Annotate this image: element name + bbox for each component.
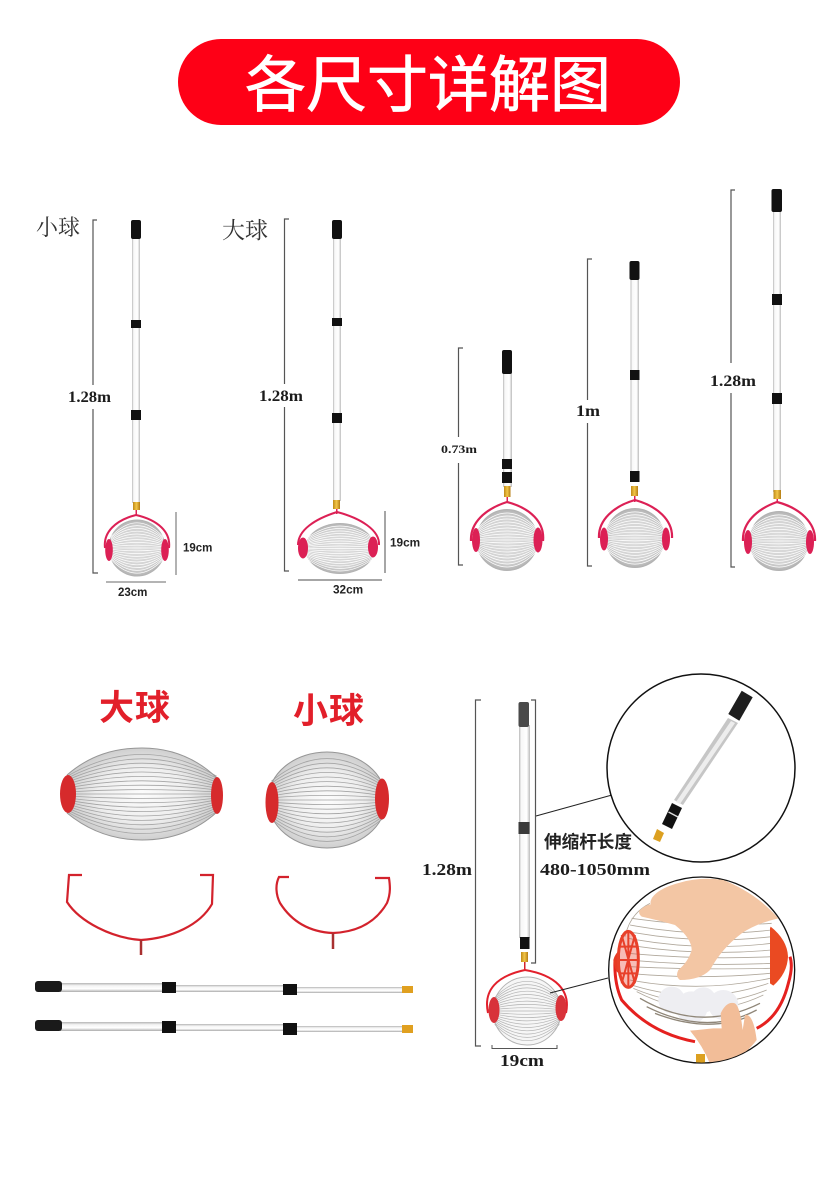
golf balls [658, 987, 738, 1023]
pole [772, 189, 782, 503]
panel: tool at 1m [576, 259, 672, 568]
ball with handle [298, 512, 379, 574]
pole length bracket [531, 700, 536, 963]
dimension label: 32cm: 32cm [333, 582, 363, 596]
panel: tool at 0.73m [441, 348, 543, 571]
connector to pole detail [536, 795, 612, 816]
pole [518, 702, 530, 971]
height label: 0.73m [441, 444, 477, 456]
height bracket [284, 219, 289, 571]
dimension label: 19cm: 19cm [183, 542, 212, 554]
height bracket [588, 259, 592, 566]
front wires [640, 998, 760, 1024]
pole [630, 261, 640, 502]
panel: parts comparison [35, 680, 413, 1035]
overall height bracket [476, 700, 481, 1046]
telescopic pole 2 [35, 1020, 413, 1035]
dimension: height 19cm [175, 512, 177, 575]
dimension: height 19cm [384, 511, 386, 573]
dimension: width 23cm [106, 581, 166, 583]
callout: pole detail circle [607, 674, 795, 862]
panel: full tool with callouts [422, 674, 795, 1070]
right end cap [770, 927, 788, 986]
title banner [178, 35, 680, 125]
dimension label: 19cm: 19cm [500, 1051, 544, 1070]
dimension: width 32cm [298, 579, 382, 581]
ball with handle [599, 500, 672, 568]
ball with handle [487, 970, 567, 1045]
height bracket [93, 220, 98, 573]
pole [131, 220, 141, 516]
height label: 1.28m [259, 388, 304, 405]
height label: 1m [576, 403, 601, 420]
height bracket [731, 190, 735, 567]
panel: small ball tool, 1.28m [36, 215, 212, 599]
callout: ball with golf balls circle [609, 877, 795, 1064]
gold connector [696, 1054, 705, 1063]
big wire ball [60, 748, 223, 840]
dimension label: 23cm: 23cm [118, 587, 147, 599]
red handle [615, 957, 791, 1042]
ball with handle [743, 502, 815, 571]
value: 480-1050mm: 480-1050mm [540, 860, 650, 879]
height bracket [458, 348, 463, 565]
pole [502, 350, 512, 503]
height label: 1.28m [68, 389, 112, 406]
dimension label: 19cm: 19cm [390, 536, 420, 550]
label: small ball: 小球 [36, 215, 80, 240]
ball with handle [471, 502, 543, 571]
label: big ball: 大球 [222, 218, 268, 243]
connector to ball detail [550, 978, 608, 993]
heading: small ball: 小球 [293, 683, 365, 734]
upper hand [639, 879, 778, 980]
height label: 1.28m [710, 373, 757, 390]
ball with handle [105, 515, 169, 576]
title text: 各尺寸详解图 [245, 35, 611, 124]
overall height label: 1.28m [422, 860, 472, 879]
small ball handle [276, 877, 390, 949]
big ball handle [67, 875, 213, 955]
telescopic pole 1 [35, 981, 413, 995]
small wire ball [266, 752, 389, 848]
dimension: width 19cm [492, 1045, 557, 1048]
heading: big ball: 大球 [99, 680, 171, 731]
lower hand [690, 1003, 757, 1064]
left end cap [613, 931, 638, 987]
wire cage [625, 903, 772, 1009]
label: pole length: 伸缩杆长度 [544, 829, 632, 854]
pole [332, 220, 342, 514]
panel: big ball tool, 1.28m [222, 218, 420, 596]
panel: tool at 1.28m [710, 189, 815, 571]
